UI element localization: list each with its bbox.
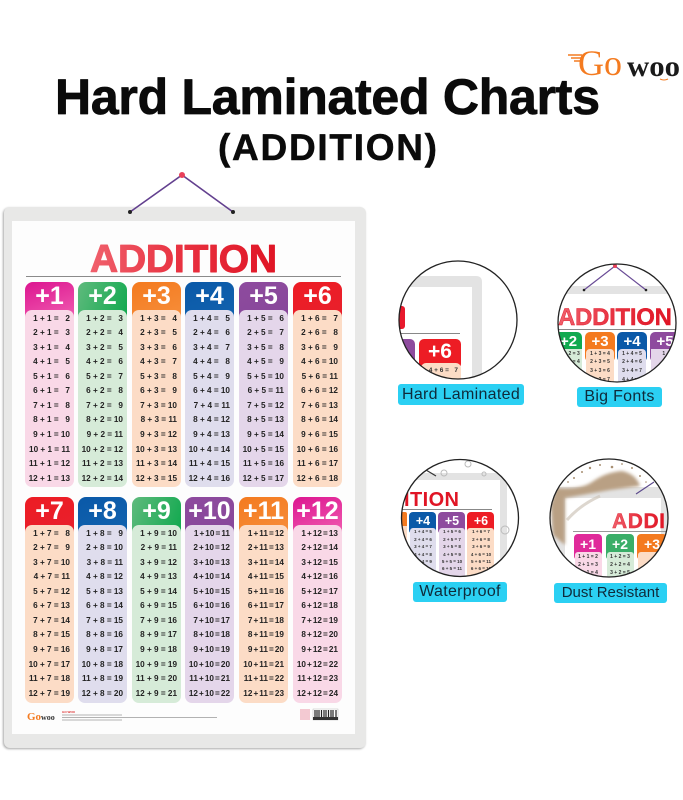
subheading: (ADDITION): (ADDITION) <box>218 127 437 168</box>
circle: dust resistant detail: 1 + 1 = 2 <box>578 554 598 560</box>
equations +5: 9 + 5 = 14 <box>247 430 284 439</box>
equations +8 <box>78 525 127 703</box>
circle: big fonts detail: 2 + 3 = 5 <box>590 359 610 365</box>
circle: big fonts detail: + 2 = 3 <box>564 351 580 357</box>
label: Big Fonts: Big Fonts <box>584 388 655 405</box>
equations +9: 6 + 9 = 15 <box>140 601 177 610</box>
circle: waterproof detail <box>400 458 520 578</box>
circle: waterproof detail: 3 + 6 = 9 <box>472 544 490 549</box>
equations +9: 4 + 9 = 13 <box>140 572 177 581</box>
equations +7: 11 + 7 = 18 <box>29 674 70 683</box>
equations +2: 7 + 2 = 9 <box>86 401 123 410</box>
circle: waterproof detail: 5 + 4 = 9 <box>414 559 432 564</box>
logo: Gowoo <box>568 43 680 83</box>
equations +2: 6 + 2 = 8 <box>86 386 123 395</box>
equations +11 <box>239 525 288 703</box>
equations +12: 6 + 12 = 18 <box>301 601 338 610</box>
label: Dust Resistant: Dust Resistant <box>562 584 659 601</box>
equations +2: 8 + 2 = 10 <box>86 415 123 424</box>
equations +5: 2 + 5 = 7 <box>247 328 284 337</box>
equations +1: 3 + 1 = 4 <box>33 343 70 352</box>
equations +5: 12 + 5 = 17 <box>243 474 284 483</box>
equations +1: 6 + 1 = 7 <box>33 386 70 395</box>
equations +12 <box>293 525 342 703</box>
equations +10: 1 + 10 = 11 <box>194 529 230 538</box>
equations +9: 9 + 9 = 18 <box>140 645 177 654</box>
equations +12: 9 + 12 = 21 <box>301 645 338 654</box>
equations +6 <box>293 310 342 487</box>
equations +3: 6 + 3 = 9 <box>140 386 177 395</box>
circle: big fonts detail: 4 + 4 = 8 <box>622 377 642 383</box>
equations +8: 4 + 8 = 12 <box>86 572 123 581</box>
equations +11: 12 + 11 = 23 <box>243 689 284 698</box>
poster frame <box>4 207 366 748</box>
equations +8: 1 + 8 = 9 <box>86 529 123 538</box>
header +5: +5 <box>249 282 278 310</box>
equations +9: 11 + 9 = 20 <box>136 674 177 683</box>
circle: big fonts detail: 1 + 3 = 4 <box>590 351 610 357</box>
equations +9: 2 + 9 = 11 <box>141 543 177 552</box>
equations +8: 10 + 8 = 18 <box>82 660 123 669</box>
equations +10: 4 + 10 = 14 <box>193 572 230 581</box>
circle: hard laminated detail <box>398 260 518 380</box>
equations +3: 7 + 3 = 10 <box>140 401 177 410</box>
circle: dust resistant detail: 3 + 1 = 4 <box>578 570 598 576</box>
circle: big fonts detail: + 2 = 4 <box>564 359 580 365</box>
equations +11: 8 + 11 = 19 <box>248 630 284 639</box>
equations +1: 11 + 1 = 12 <box>29 459 70 468</box>
equations +4: 12 + 4 = 16 <box>189 474 230 483</box>
circle: waterproof detail: 5 + 5 = 10 <box>442 559 463 564</box>
equations +12: 1 + 12 = 13 <box>301 529 338 538</box>
equations +4: 8 + 4 = 12 <box>193 415 230 424</box>
circle: dust resistant detail <box>548 458 673 582</box>
equations +1: 12 + 1 = 13 <box>29 474 70 483</box>
column +4 <box>185 282 234 487</box>
header +10 <box>185 497 234 533</box>
header +4 <box>185 282 234 318</box>
equations +2: 5 + 2 = 7 <box>86 372 123 381</box>
equations +7: 5 + 7 = 12 <box>33 587 70 596</box>
circle: dust resistant detail: +1 <box>580 536 596 552</box>
equations +5: 11 + 5 = 16 <box>243 459 284 468</box>
circle: dust resistant detail: 2 + 2 = 4 <box>610 562 630 568</box>
header +8: +8 <box>88 497 117 525</box>
equations +10 <box>185 525 234 703</box>
equations +4: 4 + 4 = 8 <box>193 357 230 366</box>
footer logo <box>27 711 55 723</box>
equations +4: 11 + 4 = 15 <box>189 459 230 468</box>
header +6: +6 <box>303 282 332 310</box>
equations +2: 10 + 2 = 12 <box>82 445 123 454</box>
equations +2: 2 + 2 = 4 <box>86 328 123 337</box>
equations +11: 1 + 11 = 12 <box>248 529 284 538</box>
equations +5: 4 + 5 = 9 <box>247 357 284 366</box>
equations +9: 5 + 9 = 14 <box>140 587 177 596</box>
equations +10: 3 + 10 = 13 <box>193 558 230 567</box>
equations +12: 11 + 12 = 23 <box>297 674 338 683</box>
equations +7: 7 + 7 = 14 <box>33 616 70 625</box>
footer logo: woo <box>41 713 55 722</box>
equations +1 <box>25 310 74 487</box>
circle: waterproof detail: 2 + 5 = 7 <box>443 537 461 542</box>
circle: dust resistant detail: +2 <box>612 536 628 552</box>
column +8 <box>78 497 127 703</box>
equations +5 <box>239 310 288 487</box>
barcode <box>313 709 338 720</box>
equations +8: 2 + 8 = 10 <box>86 543 123 552</box>
equations +10: 8 + 10 = 18 <box>193 630 230 639</box>
equations +8: 11 + 8 = 19 <box>82 674 123 683</box>
equations +4: 3 + 4 = 7 <box>193 343 230 352</box>
equations +1: 10 + 1 = 11 <box>29 445 70 454</box>
equations +3: 1 + 3 = 4 <box>140 314 177 323</box>
circle: waterproof detail: +6 <box>474 514 488 528</box>
equations +1: 8 + 1 = 9 <box>33 415 70 424</box>
header +7: +7 <box>35 497 64 525</box>
circle: big fonts detail: 3 + 3 = 6 <box>590 368 610 374</box>
equations +6: 9 + 6 = 15 <box>301 430 338 439</box>
equations +3: 11 + 3 = 14 <box>136 459 177 468</box>
equations +6: 7 + 6 = 13 <box>301 401 338 410</box>
header +8 <box>78 497 127 533</box>
circle: dust resistant detail: ADDI <box>612 510 665 533</box>
circle: big fonts detail <box>557 263 677 383</box>
equations +8: 6 + 8 = 14 <box>86 601 123 610</box>
equations +9: 12 + 9 = 21 <box>136 689 177 698</box>
circle: big fonts detail: 2 + 4 = 6 <box>622 359 642 365</box>
column +2 <box>78 282 127 487</box>
circle: big fonts detail: +3 <box>591 333 609 350</box>
equations +7: 2 + 7 = 9 <box>33 543 70 552</box>
circle: waterproof detail: 2 + 4 = 6 <box>414 537 432 542</box>
logo: Gowoo: woo <box>627 50 680 83</box>
header +5 <box>239 282 288 318</box>
circle: waterproof detail: 3 + 4 = 7 <box>414 544 432 549</box>
equations +6: 1 + 6 = 7 <box>301 314 338 323</box>
equations +4: 9 + 4 = 13 <box>193 430 230 439</box>
equations +7: 1 + 7 = 8 <box>33 529 70 538</box>
equations +8: 5 + 8 = 13 <box>86 587 123 596</box>
header +2 <box>78 282 127 318</box>
equations +2: 4 + 2 = 6 <box>86 357 123 366</box>
equations +11: 11 + 11 = 22 <box>244 674 284 683</box>
circle: waterproof detail: 5 + 6 = 11 <box>471 559 492 564</box>
header +12: +12 <box>296 497 339 525</box>
equations +11: 5 + 11 = 16 <box>248 587 284 596</box>
circle: big fonts detail: 3 + 4 = 7 <box>622 368 642 374</box>
circle: big fonts detail: 2 + 5 <box>662 359 674 365</box>
equations +5: 10 + 5 = 15 <box>243 445 284 454</box>
column +10 <box>185 497 234 703</box>
equations +4: 5 + 4 = 9 <box>193 372 230 381</box>
equations +10: 7 + 10 = 17 <box>193 616 230 625</box>
equations +1: 9 + 1 = 10 <box>33 430 70 439</box>
header +1 <box>25 282 74 318</box>
circle: waterproof detail: 4 + 4 = 8 <box>414 552 432 557</box>
footer publisher text: GO WOO <box>62 710 76 714</box>
poster white sheet <box>12 221 355 734</box>
equations +3: 10 + 3 = 13 <box>136 445 177 454</box>
equations +3: 9 + 3 = 12 <box>140 430 177 439</box>
circle: waterproof detail: 1 + 6 = 7 <box>472 529 490 534</box>
equations +8: 9 + 8 = 17 <box>86 645 123 654</box>
circle: big fonts detail: ADDITION <box>558 304 672 331</box>
label: Hard Laminated: Hard Laminated <box>402 386 520 403</box>
equations +4: 10 + 4 = 14 <box>189 445 230 454</box>
equations +2: 11 + 2 = 13 <box>82 459 123 468</box>
circle: big fonts detail: +2 <box>560 333 577 350</box>
poster title rule <box>26 276 341 277</box>
circle: waterproof detail: +4 <box>416 514 430 528</box>
header +7 <box>25 497 74 533</box>
equations +4: 1 + 4 = 5 <box>193 314 230 323</box>
detail circles <box>398 260 677 578</box>
circle: big fonts detail: 1 + 5 <box>662 351 674 357</box>
equations +7: 12 + 7 = 19 <box>29 689 70 698</box>
equations +10: 12 + 10 = 22 <box>189 689 230 698</box>
header +11: +11 <box>243 497 284 525</box>
equations +8: 7 + 8 = 15 <box>86 616 123 625</box>
equations +2: 3 + 2 = 5 <box>86 343 123 352</box>
header +9: +9 <box>142 497 171 525</box>
equations +1: 4 + 1 = 5 <box>33 357 70 366</box>
equations +5: 8 + 5 = 13 <box>247 415 284 424</box>
equations +3 <box>132 310 181 487</box>
equations +4: 2 + 4 = 6 <box>193 328 230 337</box>
circle: waterproof detail: 6 + 5 = 11 <box>442 566 463 571</box>
equations +11: 2 + 11 = 13 <box>248 543 284 552</box>
main title <box>55 69 600 168</box>
equations +9: 10 + 9 = 19 <box>136 660 177 669</box>
header +2: +2 <box>88 282 117 310</box>
equations +9: 7 + 9 = 16 <box>140 616 177 625</box>
equations +2 <box>78 310 127 487</box>
equations +8: 3 + 8 = 11 <box>87 558 123 567</box>
poster title: ADDITION: ADDITION <box>90 238 277 280</box>
equations +4 <box>185 310 234 487</box>
header +3: +3 <box>142 282 171 310</box>
circle: waterproof detail: 4 + 6 = 10 <box>471 552 492 557</box>
equations +3: 12 + 3 = 15 <box>136 474 177 483</box>
equations +1: 5 + 1 = 6 <box>33 372 70 381</box>
equations +6: 6 + 6 = 12 <box>301 386 338 395</box>
equations +9: 3 + 9 = 12 <box>140 558 177 567</box>
equations +6: 4 + 6 = 10 <box>301 357 338 366</box>
header +1: +1 <box>35 282 64 310</box>
equations +7: 9 + 7 = 16 <box>33 645 70 654</box>
equations +5: 1 + 5 = 6 <box>247 314 284 323</box>
column +11 <box>239 497 288 703</box>
equations +6: 3 + 6 = 9 <box>301 343 338 352</box>
circle: big fonts detail: +5 <box>656 333 674 350</box>
header +11 <box>239 497 288 533</box>
circle: waterproof detail: +5 <box>445 514 459 528</box>
equations +11: 7 + 11 = 18 <box>248 616 284 625</box>
circle: waterproof detail: 4 + 5 = 9 <box>443 552 461 557</box>
equations +3: 4 + 3 = 7 <box>140 357 177 366</box>
equations +1: 1 + 1 = 2 <box>33 314 70 323</box>
equations +12: 2 + 12 = 14 <box>301 543 338 552</box>
circle: waterproof detail: 6 + 6 = 12 <box>471 566 492 571</box>
circle: dust resistant detail: +3 <box>644 536 660 552</box>
equations +11: 3 + 11 = 14 <box>248 558 284 567</box>
circle: waterproof detail: 1 + 5 = 6 <box>443 529 461 534</box>
column +12 <box>293 497 342 703</box>
equations +10: 6 + 10 = 16 <box>193 601 230 610</box>
circle: dust resistant detail: 3 + 2 = 5 <box>610 570 630 576</box>
equations +7: 6 + 7 = 13 <box>33 601 70 610</box>
equations +11: 9 + 11 = 20 <box>248 645 284 654</box>
header +9 <box>132 497 181 533</box>
circle: big fonts detail: 4 + 3 = 7 <box>590 377 610 383</box>
equations +7: 8 + 7 = 15 <box>33 630 70 639</box>
equations +12: 7 + 12 = 19 <box>301 616 338 625</box>
column +5 <box>239 282 288 487</box>
equations +4: 7 + 4 = 11 <box>194 401 230 410</box>
circle: hard laminated detail: +6 <box>428 340 452 363</box>
equations +2: 9 + 2 = 11 <box>87 430 123 439</box>
label: Waterproof: Waterproof <box>419 583 501 600</box>
equations +10: 11 + 10 = 21 <box>189 674 230 683</box>
equations +4: 6 + 4 = 10 <box>193 386 230 395</box>
footer publisher text <box>62 710 217 720</box>
equations +10: 2 + 10 = 12 <box>193 543 230 552</box>
column +7 <box>25 497 74 703</box>
equations +12: 12 + 12 = 24 <box>297 689 338 698</box>
equations +5: 5 + 5 = 10 <box>247 372 284 381</box>
equations +7: 4 + 7 = 11 <box>34 572 70 581</box>
equations +6: 5 + 6 = 11 <box>302 372 338 381</box>
equations +12: 4 + 12 = 16 <box>301 572 338 581</box>
equations +8: 8 + 8 = 16 <box>86 630 123 639</box>
equations +6: 8 + 6 = 14 <box>301 415 338 424</box>
circle: big fonts detail: +4 <box>623 333 641 350</box>
equations +11: 6 + 11 = 17 <box>248 601 284 610</box>
circle: hard laminated detail: 4 + 6 = 7 <box>429 367 458 374</box>
equations +5: 7 + 5 = 12 <box>247 401 284 410</box>
equations +11: 4 + 11 = 15 <box>248 572 284 581</box>
equations +10: 9 + 10 = 19 <box>193 645 230 654</box>
equations +2: 1 + 2 = 3 <box>86 314 123 323</box>
header +6 <box>293 282 342 318</box>
header +4: +4 <box>195 282 224 310</box>
equations +9: 8 + 9 = 17 <box>140 630 177 639</box>
equations +10: 10 + 10 = 20 <box>189 660 230 669</box>
circle: waterproof detail: 3 + 5 = 8 <box>443 544 461 549</box>
equations +7: 10 + 7 = 17 <box>29 660 70 669</box>
circle: dust resistant detail: 2 + 1 = 3 <box>578 562 598 568</box>
header +3 <box>132 282 181 318</box>
equations +7: 3 + 7 = 10 <box>33 558 70 567</box>
poster footer <box>27 708 338 723</box>
column +3 <box>132 282 181 487</box>
hanger string <box>128 172 235 214</box>
header +12 <box>293 497 342 533</box>
qr code <box>300 709 310 720</box>
heading: Hard Laminated Charts: Hard Laminated Charts <box>55 69 600 125</box>
circle: waterproof detail: ITION <box>404 489 459 511</box>
circle: waterproof detail: 1 + 4 = 5 <box>414 529 432 534</box>
equations +8: 12 + 8 = 20 <box>82 689 123 698</box>
circle: waterproof detail: 2 + 6 = 8 <box>472 537 490 542</box>
equations +6: 11 + 6 = 17 <box>297 459 338 468</box>
equations +12: 5 + 12 = 17 <box>301 587 338 596</box>
equations +12: 10 + 12 = 22 <box>297 660 338 669</box>
logo: Gowoo: Go <box>578 43 622 83</box>
circle: big fonts detail: 1 + 4 = 5 <box>622 351 642 357</box>
column +6 <box>293 282 342 487</box>
circle: dust resistant detail: 1 + 2 = 3 <box>610 554 630 560</box>
footer logo: Go <box>27 711 42 723</box>
equations +3: 2 + 3 = 5 <box>140 328 177 337</box>
column +9 <box>132 497 181 703</box>
equations +6: 10 + 6 = 16 <box>297 445 338 454</box>
equations +9: 1 + 9 = 10 <box>140 529 177 538</box>
equations +12: 3 + 12 = 15 <box>301 558 338 567</box>
equations +1: 7 + 1 = 8 <box>33 401 70 410</box>
equations +2: 12 + 2 = 14 <box>82 474 123 483</box>
equations +11: 10 + 11 = 21 <box>243 660 284 669</box>
equations +12: 8 + 12 = 20 <box>301 630 338 639</box>
header +10: +10 <box>188 497 231 525</box>
equations +9 <box>132 525 181 703</box>
equations +5: 3 + 5 = 8 <box>247 343 284 352</box>
equations +6: 2 + 6 = 8 <box>301 328 338 337</box>
column +1 <box>25 282 74 487</box>
equations +1: 2 + 1 = 3 <box>33 328 70 337</box>
equations +7 <box>25 525 74 703</box>
equations +3: 3 + 3 = 6 <box>140 343 177 352</box>
equations +6: 12 + 6 = 18 <box>297 474 338 483</box>
equations +10: 5 + 10 = 15 <box>193 587 230 596</box>
equations +3: 5 + 3 = 8 <box>140 372 177 381</box>
equations +3: 8 + 3 = 11 <box>141 415 177 424</box>
equations +5: 6 + 5 = 11 <box>248 386 284 395</box>
